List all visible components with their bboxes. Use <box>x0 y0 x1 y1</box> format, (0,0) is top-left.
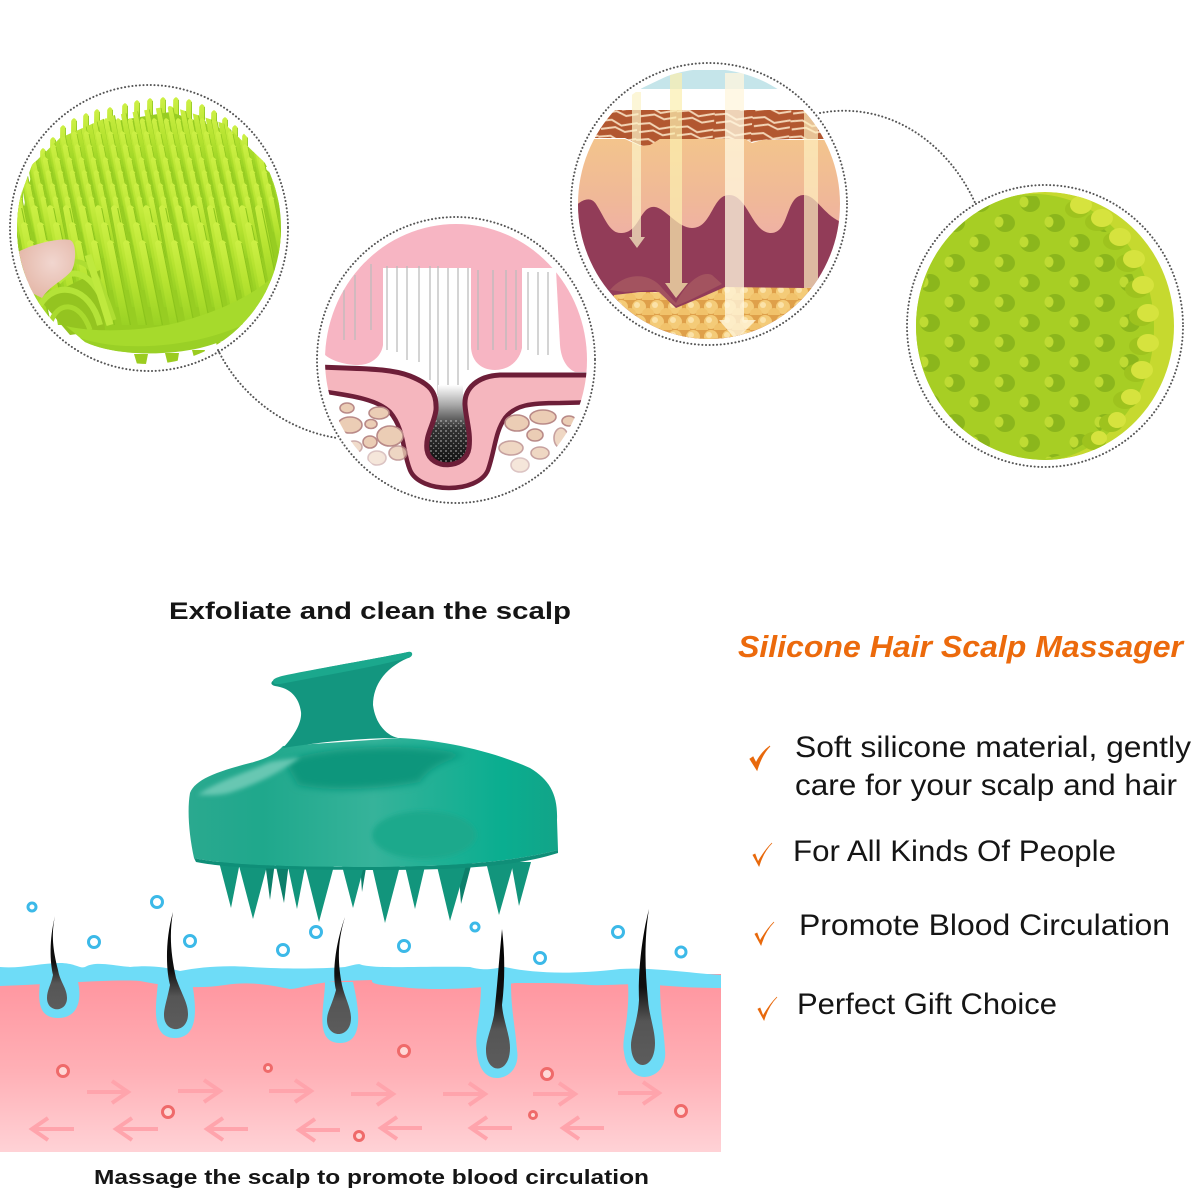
hair follicle 4 <box>476 929 517 1078</box>
thumb <box>18 240 75 298</box>
skin cross-section <box>578 70 840 339</box>
panel: green bristle close-up circle <box>0 85 306 375</box>
bristle photo <box>17 97 281 364</box>
back fringe of bristles <box>16 97 249 252</box>
icon: check 1 <box>750 746 770 770</box>
gloss highlight <box>198 757 300 795</box>
dotted ring <box>317 217 595 503</box>
red blood cells <box>58 1046 686 1140</box>
feature text: gift: Perfect Gift Choice <box>797 988 1057 1021</box>
thumb dimple <box>372 811 476 859</box>
icon: check 3 <box>755 922 774 945</box>
feature list <box>750 731 1191 1021</box>
spikes <box>219 862 531 923</box>
skin lower outline <box>320 391 600 488</box>
flow arrows rightward <box>87 1080 659 1105</box>
feature text: soft silicone: care for your scalp and hair <box>795 769 1177 802</box>
panel: scalp follicle cleaning circle <box>317 217 600 508</box>
caption: massage: Massage the scalp to promote blood circulation <box>94 1166 649 1189</box>
panel: massage nub circle <box>907 185 1183 467</box>
feature text: all people: For All Kinds Of People <box>793 835 1116 868</box>
feature text: soft silicone: Soft silicone material, gently <box>795 731 1191 764</box>
bristle lines <box>344 264 548 410</box>
dotted ring <box>571 63 847 345</box>
connector: skin circle to nub circle <box>820 111 976 205</box>
flow arrows leftward <box>32 1117 604 1141</box>
feature text: blood circulation: Promote Blood Circulation <box>799 909 1170 942</box>
handle <box>271 652 412 748</box>
dotted ring <box>10 85 288 371</box>
pink columns between bristles <box>320 262 600 372</box>
heading: exfoliate caption: Exfoliate and clean the scalp <box>169 598 571 625</box>
icon: check 4 <box>758 997 777 1020</box>
hair follicle 2 <box>156 912 195 1038</box>
pore with debris <box>428 385 468 463</box>
skin layer <box>320 367 600 486</box>
pink skin <box>0 974 721 1152</box>
skin top outline <box>320 367 600 465</box>
illustration: scalp cross-section <box>0 896 721 1152</box>
product: teal scalp massager <box>189 652 558 923</box>
connector: bristle circle to follicle circle <box>218 350 337 438</box>
outer skin layer <box>594 110 824 146</box>
hair follicle 1 <box>39 916 79 1018</box>
fat layer <box>614 287 812 339</box>
follicle illustration <box>325 224 587 490</box>
underside shadow <box>194 850 558 870</box>
icon: check 2 <box>753 843 772 866</box>
rim nubs <box>1065 196 1159 450</box>
dermis <box>578 195 839 339</box>
hair follicle 5 <box>623 909 665 1077</box>
hair follicle 3 <box>322 917 358 1043</box>
dome shadow <box>285 747 465 789</box>
blue surface band <box>0 963 721 989</box>
silicone nub disc <box>910 190 1175 465</box>
fat cells <box>338 403 576 472</box>
title: Silicone Hair Scalp Massager <box>738 629 1185 664</box>
coiled bristles <box>40 255 114 335</box>
panel: skin layers circle <box>570 60 850 350</box>
brush base rim <box>66 278 272 354</box>
body <box>189 738 558 867</box>
epidermis <box>570 139 850 240</box>
sky band <box>640 70 779 89</box>
light beams with arrows <box>629 73 818 340</box>
blue bubbles <box>28 896 686 964</box>
feature text: soft silicone <box>795 731 1191 802</box>
handle rim <box>273 652 412 684</box>
dotted ring <box>907 185 1183 467</box>
